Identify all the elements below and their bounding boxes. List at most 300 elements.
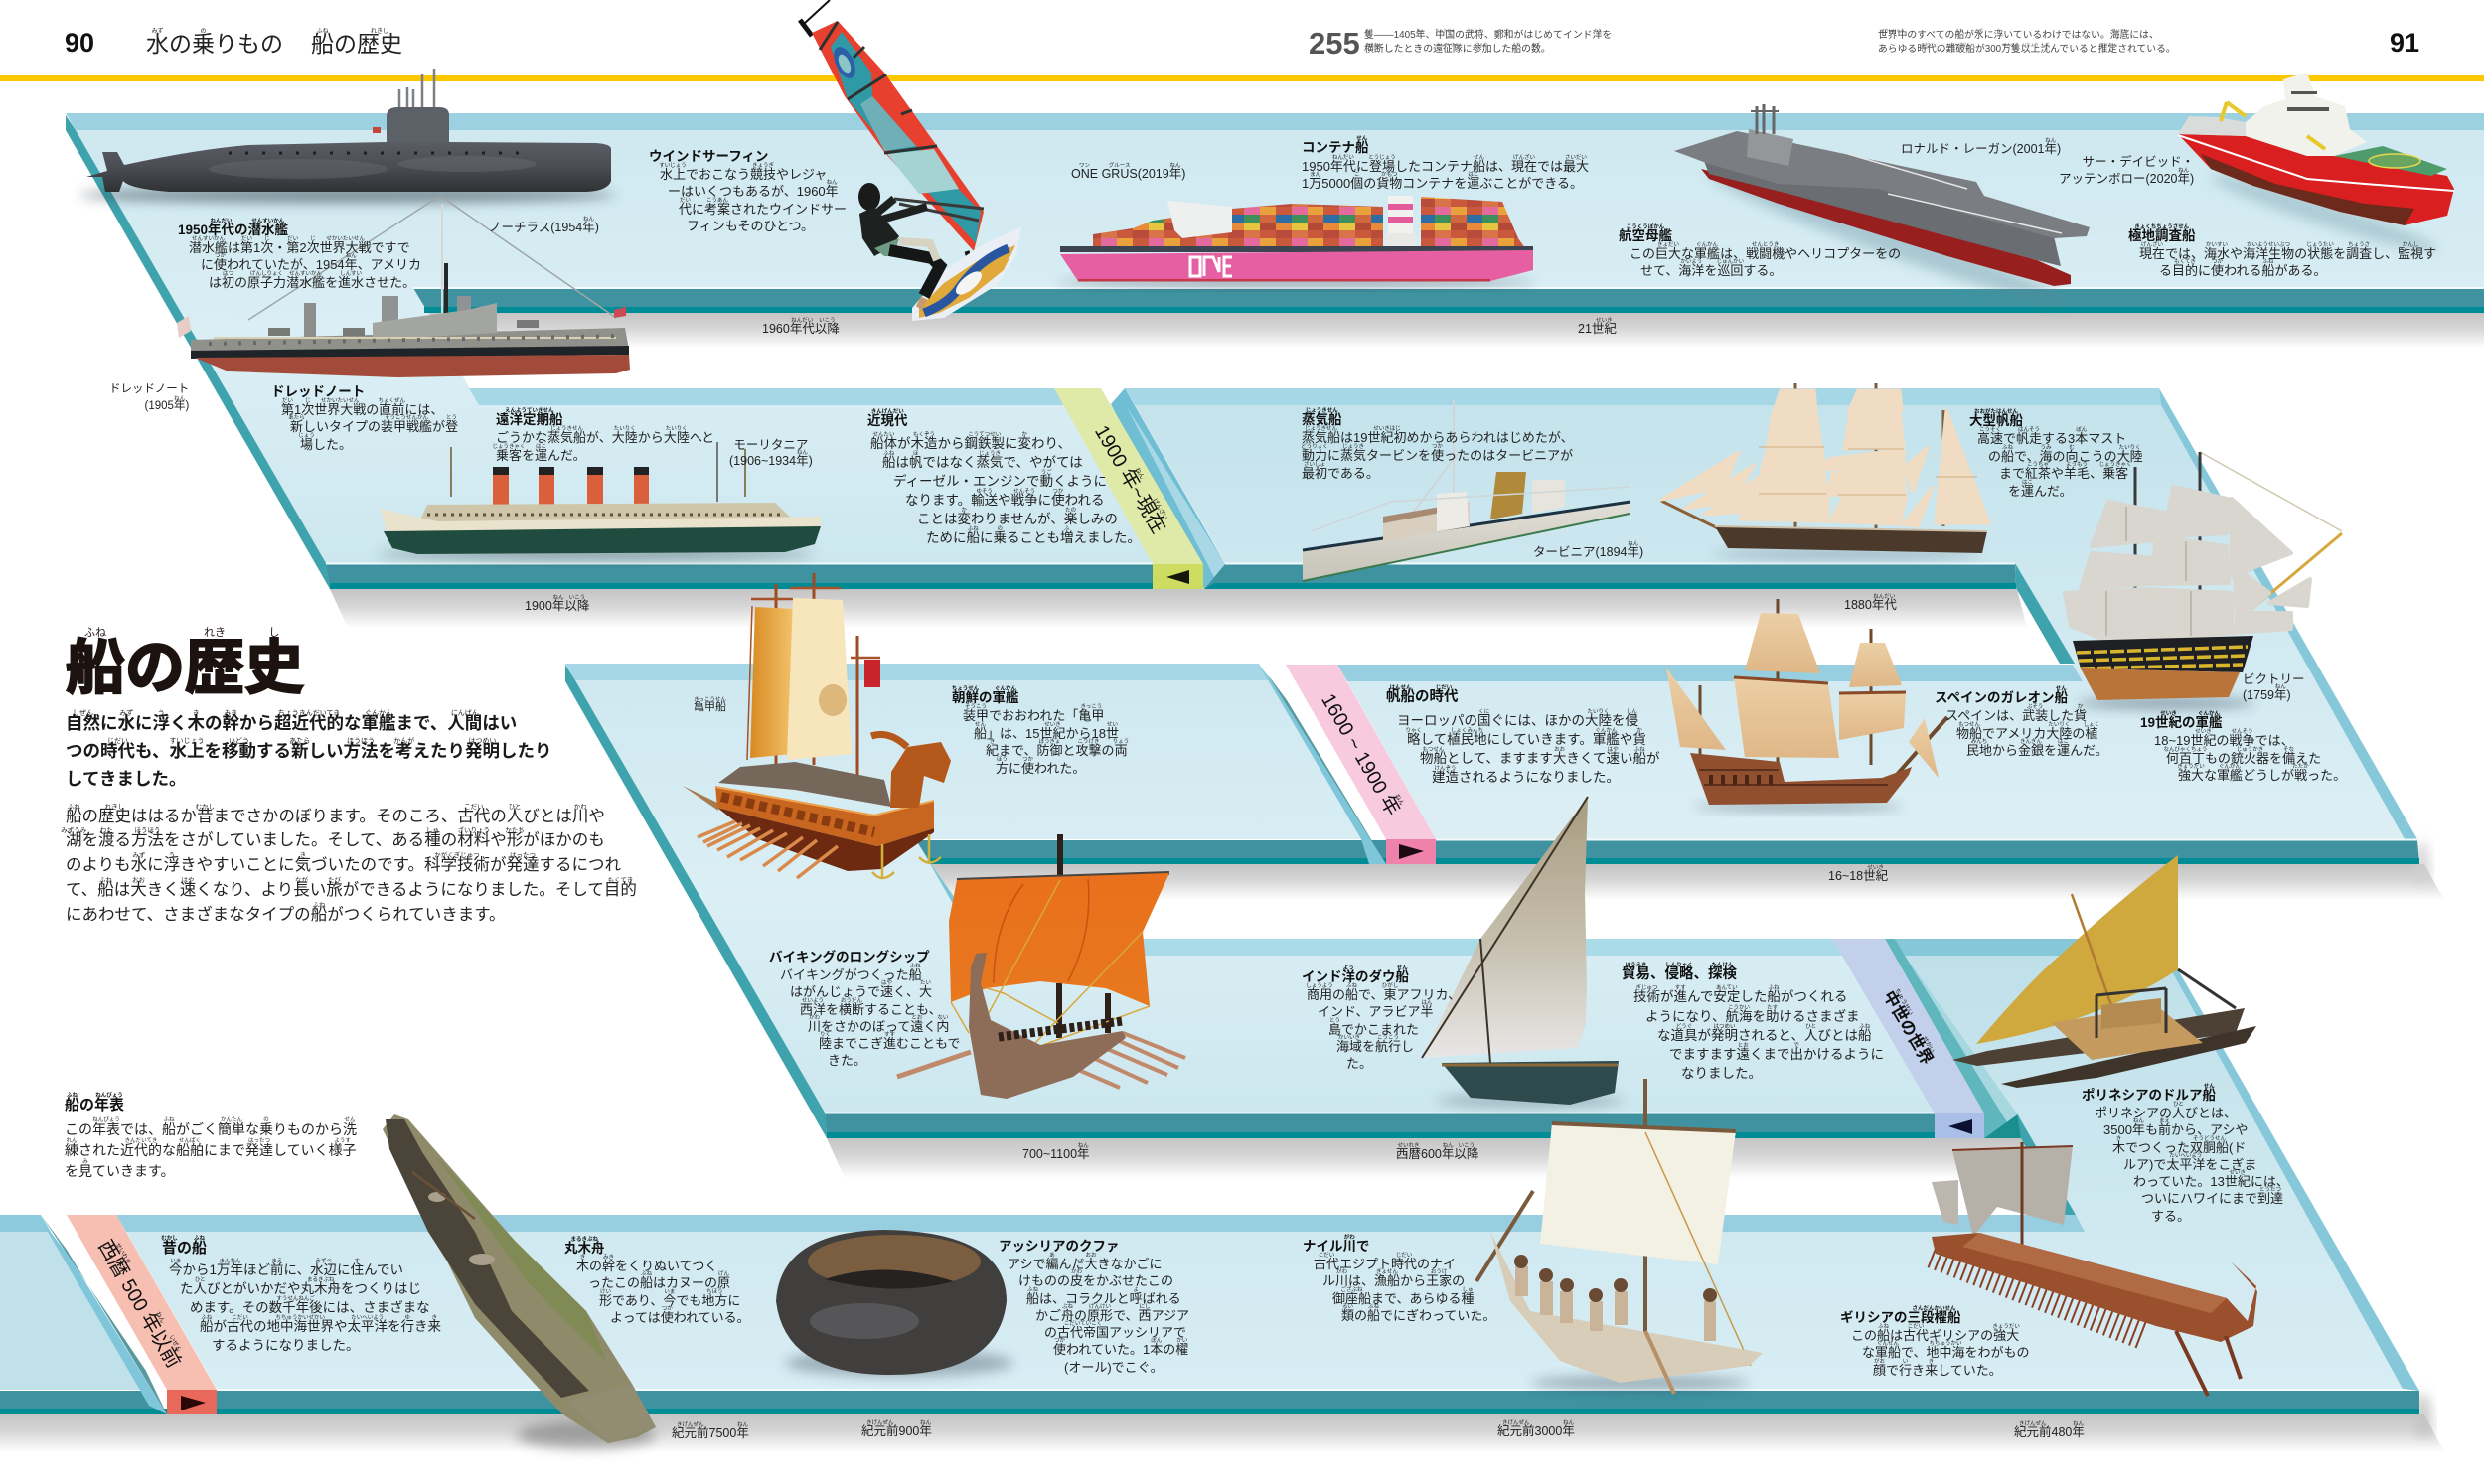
era tab label: before 500 CE: せいれき <box>114 1242 131 1265</box>
text: Greek trireme <box>1840 1309 2030 1379</box>
fact: 255 ships: ちゅうごく <box>1435 28 1455 33</box>
main heading: 船の歴史 <box>66 635 304 701</box>
text: Dreadnought: ちょくぜん <box>379 398 405 404</box>
text: Dreadnought: 場した。 <box>300 437 352 452</box>
text: container ship: さいだい <box>1565 155 1587 161</box>
ship: Egyptian Nile boat <box>1476 1079 1763 1394</box>
era tab: 1900 to present <box>1054 388 1225 589</box>
lead paragraph: ほうほう <box>347 738 375 745</box>
text: ancient boats: いま <box>170 1258 181 1263</box>
text: dugout canoe: げん <box>718 1271 729 1277</box>
label: Turbinia: タービニア(1894年) <box>1533 545 1643 559</box>
fact: shipwrecks <box>1878 28 2176 55</box>
body paragraph: むかし <box>195 803 215 811</box>
ship: submarine Nautilus <box>79 69 616 203</box>
text: windsurfing: 水上でおこなう競技やレジャ <box>660 167 827 182</box>
running title: れきし <box>371 29 388 35</box>
text: modern era: せんそう <box>1013 489 1035 495</box>
text: windsurfing: だい <box>680 198 691 204</box>
fact: shipwrecks: あらゆる時代の難破船が300万隻以上沈んでいると推定されている。 <box>1878 44 2176 55</box>
text: steamship: つか <box>1432 444 1443 450</box>
text: Viking longship: 川をさかのぼって遠く内 <box>808 1019 949 1034</box>
text: Korean warship: せい <box>1107 721 1118 727</box>
text: trade, invasion, exploration: あんてい <box>1716 985 1738 991</box>
text: age of sail: 帆船の時代 <box>1386 689 1459 705</box>
text: trade, invasion, exploration: 技術が進んで安定した船がつくれる <box>1633 989 1847 1004</box>
text: Nile boats: ナイル川で <box>1303 1239 1369 1254</box>
ship: container ship ONE Grus <box>1058 196 1535 286</box>
text: Assyrian coracle: の古代帝国アッシリアで <box>1044 1325 1186 1340</box>
text: 19th century warships: ぐんかん <box>2219 764 2241 770</box>
text: polar research ship: る目的に使われる船がある。 <box>2159 263 2326 278</box>
text: timeline intro: ねんぴょう <box>95 1093 123 1099</box>
text: age of sail <box>1386 684 1660 785</box>
text: container ship: とうじょう <box>1368 155 1396 161</box>
text: age of sail: じだい <box>1436 685 1452 691</box>
text: 1950s submarines: せんすいかん <box>251 219 284 224</box>
text: trade, invasion, exploration: はつめい <box>1713 1024 1736 1030</box>
text: polar research ship <box>2128 223 2436 278</box>
text: age of sail: はんせん <box>1389 685 1412 691</box>
text: Dreadnought: だい <box>282 398 293 404</box>
text: Viking longship: はがんじょうで速く、大 <box>790 984 932 999</box>
text: Indian Ocean dhow <box>1302 965 1461 1071</box>
text: ancient boats: みずべ <box>316 1258 332 1263</box>
text: container ship: 1万5000個の貨物コンテナを運ぶことができる。 <box>1302 176 1583 191</box>
text: 1950s submarines: しんすい <box>340 271 362 277</box>
text: steamship: じょうき <box>1342 444 1364 450</box>
text: ocean liner: はこ <box>536 444 546 450</box>
text: Indian Ocean dhow: ひがし <box>1382 983 1398 989</box>
label: Mauretania: (1906~1934年) <box>729 454 813 468</box>
main heading: ふね <box>84 627 106 639</box>
body paragraph: しゅ <box>426 827 439 834</box>
label: 700 to 1100: 700~1100年 <box>1022 1147 1090 1161</box>
text: 1950s submarines: ねんだい <box>211 219 233 224</box>
text: Viking longship <box>769 950 961 1068</box>
text: Korean warship: きっこう <box>1080 704 1102 710</box>
text: dugout canoe: よっては使われている。 <box>610 1310 750 1325</box>
text: Dreadnought: そうこうせんかん <box>385 415 428 421</box>
text: age of sail: たいりく <box>1587 709 1610 715</box>
text: modern era: 船は帆ではなく蒸気で、やがては <box>882 455 1083 470</box>
text: windsurfing <box>649 149 847 233</box>
text: timeline intro: きんだいてき <box>125 1138 157 1144</box>
text: timeline intro: せん <box>344 1116 356 1122</box>
text: 1950s submarines: 潜水艦は第1次・第2次世界大戦ですで <box>189 240 410 255</box>
label: 1900 onward: 1900年以降 <box>525 599 589 613</box>
ship: Greek trireme <box>1932 1142 2257 1396</box>
text: trade, invasion, exploration <box>1622 962 1884 1083</box>
text: ocean liner: 乗客を運んだ。 <box>496 448 586 463</box>
text: ocean liner: たいりく <box>614 426 636 432</box>
text: dugout canoe: まるきぶね <box>570 1237 598 1243</box>
label: Turbinia: ねん <box>1628 541 1638 547</box>
text: Polynesian canoe: ポリネシアの人びとは、 <box>2095 1106 2237 1120</box>
timeline band: 1960s to 21st century, joined to 1900s band <box>66 113 2484 589</box>
text: trade, invasion, exploration: ふね <box>1769 985 1780 991</box>
text: 1950s submarines: せかいたいせん <box>326 236 365 242</box>
text: modern era: ほ <box>913 451 919 457</box>
text: 19th century warships: せんそう <box>2232 729 2253 735</box>
label: Victory: (1759年) <box>2243 688 2291 702</box>
era tab label: before 500 CE: 西暦 500 年以前 <box>93 1237 185 1372</box>
body paragraph: はったつ <box>510 852 536 859</box>
text: modern era: ことは変わりませんが、楽しみの <box>917 512 1118 526</box>
text: steamship: 最初である。 <box>1302 466 1379 481</box>
text: aircraft carrier: せんとうき <box>1752 242 1779 248</box>
text: dugout canoe: けい <box>600 1289 611 1295</box>
text: modern era: か <box>1021 431 1027 437</box>
text: age of sail: 建造されるようになりました。 <box>1432 769 1620 785</box>
text: dugout canoe: ちほう <box>706 1289 723 1295</box>
text: trade, invasion, exploration: たんけん <box>1711 963 1734 968</box>
text: Viking longship: おうだん <box>841 998 862 1004</box>
body paragraph: かたち <box>505 827 525 834</box>
page number 91: 91 <box>2390 28 2419 58</box>
body paragraph: わた <box>100 827 113 834</box>
text: Greek trireme: がお <box>1874 1359 1885 1365</box>
text: timeline intro: かんたん <box>221 1116 242 1122</box>
text: aircraft carrier: 航空母艦 <box>1619 228 1672 243</box>
label: 900 BCE: 紀元前900年 <box>861 1424 932 1438</box>
text: Polynesian canoe: たいへいよう <box>2169 1153 2202 1159</box>
text: Indian Ocean dhow: かいいき <box>1338 1035 1360 1041</box>
label: Dreadnought left: ねん <box>174 396 185 402</box>
text: Polynesian canoe: わっていた。13世紀には、 <box>2133 1174 2289 1189</box>
text: Greek trireme: 顔で行き来していた。 <box>1873 1363 2002 1378</box>
body paragraph: ふね <box>312 902 325 909</box>
label: 700 to 1100: ねん <box>1078 1143 1089 1149</box>
text: ancient boats: た人びとがいかだや丸木舟をつくりはじ <box>180 1281 421 1295</box>
text: Indian Ocean dhow: とう <box>1329 1018 1340 1024</box>
era tab label: before 500 CE: いぜん <box>168 1334 182 1353</box>
fact: 255 ships: ふね <box>1512 42 1520 47</box>
ship: Korean turtle ship <box>683 573 951 878</box>
fact: shipwrecks: いじょう <box>2023 42 2039 47</box>
ship: Spanish galleon <box>1666 599 1947 811</box>
lead paragraph: いどう <box>229 738 249 745</box>
body paragraph: たび <box>328 877 341 884</box>
label: after 600 CE: いこう <box>1459 1143 1475 1149</box>
lead paragraph: ぐんかん <box>365 710 392 717</box>
text: Spanish galleon: きんぎん <box>2020 739 2042 745</box>
text: 1950s submarines <box>178 218 421 290</box>
label: 7500 BCE: ねん <box>737 1422 748 1428</box>
text: steamship: じょうきせん <box>1306 408 1338 414</box>
label: Victory: ビクトリー <box>2243 672 2305 686</box>
text: ancient boats: ちちゅうかいせかい <box>275 1315 325 1321</box>
text: steamship: 動力に蒸気タービンを使ったのはタービニアが <box>1302 448 1573 463</box>
text: ocean liner: えんようていきせん <box>505 408 554 414</box>
text: polar research ship: きょくちちょうさせん <box>2134 224 2189 230</box>
text: Assyrian coracle: ぽん <box>1151 1338 1162 1344</box>
label: 1880s: 1880年代 <box>1844 598 1897 612</box>
text: Assyrian coracle: よ <box>1133 1287 1139 1293</box>
text: Polynesian canoe: まえ <box>2159 1118 2170 1124</box>
text: Korean warship: りょう <box>1113 739 1129 745</box>
text: windsurfing: ーはいくつもあるが、1960年 <box>668 184 839 199</box>
text: aircraft carrier: じゅんかい <box>1717 259 1744 265</box>
text: Assyrian coracle: かい <box>1176 1338 1187 1344</box>
fact: 255 ships: ぶしょう <box>1467 28 1482 33</box>
text: modern era: ふ <box>1064 526 1070 532</box>
text: modern era: ふね <box>883 451 894 457</box>
text: aircraft carrier: かいよう <box>1680 259 1702 265</box>
label: 1960s onward: いこう <box>819 318 836 324</box>
lead paragraph: してきました。 <box>66 769 186 789</box>
fact: 255 ships: さんか <box>1476 42 1488 47</box>
text: Polynesian canoe: せん <box>2204 1084 2215 1090</box>
text: Nile boats: しゅ <box>1462 1287 1474 1293</box>
label: 1900 onward: ねん <box>553 595 564 601</box>
text: 19th century warships: 何百丁もの銃火器を備えた <box>2166 751 2321 765</box>
text: Greek trireme: い <box>1903 1359 1908 1365</box>
text: modern era: きんげんだい <box>871 409 904 415</box>
label: ONE GRUS: ONE GRUS(2019年) <box>1071 167 1185 181</box>
text: Nile boats: 類の船でにぎわっていた。 <box>1341 1308 1495 1323</box>
text: 19th century warships: 19世紀の軍艦 <box>2140 715 2223 730</box>
text: ocean liner: たいりく <box>666 426 688 432</box>
text: trade, invasion, exploration: なりました。 <box>1681 1066 1762 1081</box>
text: Greek trireme: ぐんせん <box>1877 1341 1899 1347</box>
body paragraph: なが <box>295 877 308 884</box>
label: after 600 CE: 西暦600年以降 <box>1396 1147 1478 1161</box>
text: Korean warship <box>952 685 1129 775</box>
text: modern era: ゆそう <box>976 489 993 495</box>
fact: shipwrecks: すいてい <box>2099 42 2115 47</box>
text: Greek trireme: こだい <box>1908 1324 1924 1330</box>
text: timeline intro: この年表では、船がごく簡単な乗りものから洗 <box>65 1120 357 1136</box>
text: age of sail: りゃく <box>1405 727 1422 733</box>
text: Greek trireme: さんだんかいせん <box>1912 1306 1956 1312</box>
text: ancient boats: するようになりました。 <box>212 1337 360 1353</box>
text: Polynesian canoe: ついにハワイにまで到達 <box>2141 1191 2283 1206</box>
text: Korean warship: ほう <box>997 757 1008 763</box>
text: large sailing ship: 高速で帆走する3本マスト <box>1977 431 2126 446</box>
timeline band: Polynesia to ancient section <box>116 939 2419 1414</box>
fact: 255 ships: おうだん <box>1366 42 1382 47</box>
text: steamship: じょうきせん <box>1305 426 1337 432</box>
label: Ronald Reagan: ロナルド・レーガン(2001年) <box>1901 142 2061 156</box>
label: 900 BCE: ねん <box>920 1420 931 1426</box>
text: age of sail: ふね <box>1634 747 1645 753</box>
text: age of sail: ヨーロッパの国ぐには、ほかの大陸を侵 <box>1397 713 1638 727</box>
text: ancient boats: ふね <box>194 1236 205 1242</box>
text: container ship: せん <box>1356 135 1367 141</box>
text: modern era: じょうき <box>979 451 1001 457</box>
text: trade, invasion, exploration: こうかい <box>1728 1005 1750 1011</box>
text: dugout canoe: 形であり、今でも地方に <box>599 1293 740 1308</box>
lead paragraph: みき <box>224 710 237 717</box>
text: trade, invasion, exploration: ぼうえき <box>1626 963 1646 968</box>
label: 3000 BCE: ねん <box>1563 1420 1574 1426</box>
text: container ship: 1950年代に登場したコンテナ船は、現在では最大 <box>1302 159 1589 173</box>
label: Victory <box>2243 672 2305 702</box>
text: windsurfing: きょうぎ <box>752 163 774 169</box>
label: 1900 onward: いこう <box>569 595 585 601</box>
era tab: medieval world <box>1832 939 2021 1138</box>
text: 1950s submarines: 1950年代の潜水艦 <box>178 223 288 237</box>
text: large sailing ship: 大型帆船 <box>1969 413 2023 428</box>
ship: Polynesian double canoe <box>1952 855 2256 1088</box>
text: Indian Ocean dhow: 商用の船で、東アフリカ、 <box>1307 987 1461 1002</box>
text: age of sail: はや <box>1608 747 1619 753</box>
text: dugout canoe: みき <box>603 1255 614 1261</box>
text: Korean warship: ぼうぎょ <box>1039 739 1060 745</box>
text: polar research ship: 極地調査船 <box>2128 228 2196 243</box>
text: age of sail: けんぞう <box>1434 765 1457 771</box>
text: Assyrian coracle: かご舟の原形で、西アジア <box>1035 1308 1189 1323</box>
text: Assyrian coracle: ふね <box>1027 1287 1038 1293</box>
text: container ship: げんざい <box>1513 155 1535 161</box>
body paragraph: ひと <box>509 803 522 811</box>
text: timeline intro: せんぱく <box>179 1138 201 1144</box>
label: 900 BCE: きげんぜん <box>866 1420 894 1426</box>
text: age of sail: 物船として、ますます大きくて速い船が <box>1420 751 1660 765</box>
text: Korean warship: せいき <box>1044 721 1061 727</box>
text: Spanish galleon: はこ <box>2058 739 2069 745</box>
text: polar research ship: もくてき <box>2174 259 2196 265</box>
text: 19th century warships: じゅうかき <box>2237 747 2263 753</box>
text: Korean warship: 方に使われた。 <box>996 761 1085 775</box>
text: age of sail: ぐんかん <box>1595 727 1617 733</box>
text: Korean warship: こうげき <box>1078 739 1100 745</box>
fact: shipwrecks: 世界中のすべての船が水に浮いているわけではない。海底には、 <box>1878 30 2159 41</box>
body paragraph: 船の歴史ははるか昔までさかのぼります。そのころ、古代の人びとは川や <box>66 807 605 824</box>
text: container ship: まん <box>1310 172 1320 178</box>
text: 1950s submarines: じ <box>310 236 316 242</box>
text: dugout canoe: 木の幹をくりぬいてつく <box>576 1259 717 1273</box>
text: large sailing ship: ようもう <box>2066 462 2088 468</box>
label: Sir David Attenborough: アッテンボロー(2020年) <box>2059 172 2194 186</box>
lead paragraph: すいじょう <box>169 738 204 745</box>
body paragraph: かわ <box>574 803 587 811</box>
fact: shipwrecks: まんせき <box>2003 42 2019 47</box>
ship: Assyrian coracle <box>776 1230 1013 1377</box>
text: Indian Ocean dhow: よう <box>1343 965 1354 971</box>
text: Nile boats: 御座船まで、あらゆる種 <box>1332 1291 1475 1306</box>
text: Viking longship: とお <box>911 1015 922 1021</box>
fact: shipwrecks: みず <box>1975 28 1983 33</box>
text: trade, invasion, exploration: 貿易、侵略、探検 <box>1622 966 1737 982</box>
body paragraph: れきし <box>105 803 124 811</box>
ship: Mauretania <box>378 442 821 559</box>
body paragraph: みず <box>132 852 145 859</box>
text: Polynesian canoe: 木でつくった双胴船(ド <box>2112 1140 2246 1155</box>
era tab label: medieval world: せかい <box>1921 1036 1935 1054</box>
text: age of sail: おお <box>1554 747 1565 753</box>
text: container ship: こ <box>1354 172 1359 178</box>
fact: 255 ships: よう <box>1593 28 1601 33</box>
label: ONE GRUS: ねん <box>1169 163 1180 169</box>
text: ocean liner: じょうきゃく <box>492 444 526 450</box>
label: 480 BCE: きげんぜん <box>2019 1421 2047 1427</box>
lead paragraph: う <box>158 710 165 717</box>
text: large sailing ship: ぼん <box>2076 427 2087 433</box>
text: Dreadnought: 第1次世界大戦の直前には、 <box>281 402 443 417</box>
yellow header rule <box>0 75 2484 81</box>
text: container ship <box>1302 135 1589 191</box>
text: modern era: つか <box>1052 489 1063 495</box>
text: Spanish galleon: たいりく <box>2048 721 2070 727</box>
text: dugout canoe: ふね <box>641 1271 652 1277</box>
text: Spanish galleon: スペインのガレオン船 <box>1935 690 2068 705</box>
text: Greek trireme: ふね <box>1878 1324 1889 1330</box>
text: Viking longship: バイキングのロングシップ <box>769 950 930 965</box>
text: Indian Ocean dhow: ふね <box>1346 983 1357 989</box>
label: Nautilus: ねん <box>583 217 594 223</box>
text: timeline intro: はったつ <box>248 1138 270 1144</box>
lead paragraph: にんげん <box>451 710 479 717</box>
text: Dreadnought: あたら <box>288 415 305 421</box>
text: Greek trireme: この船は古代ギリシアの強大 <box>1851 1328 2019 1343</box>
text: modern era: の <box>997 526 1003 532</box>
era tab label: 1600 to 1900: 1600 ~ 1900 年 <box>1317 690 1404 819</box>
text: Nile boats: ふね <box>1368 1304 1379 1310</box>
text: dugout canoe: つか <box>662 1306 673 1312</box>
text: Polynesian canoe <box>2082 1087 2289 1225</box>
text: modern era: ために船に乗ることも増えました。 <box>926 530 1141 545</box>
text: polar research ship: かんし <box>2403 242 2418 248</box>
ship: Turbinia <box>1303 400 1630 581</box>
text: Viking longship: はや <box>881 980 892 986</box>
text: steamship: どうりょく <box>1301 444 1328 450</box>
text: Polynesian canoe: せいき <box>2230 1170 2246 1176</box>
label: Sir David Attenborough: サー・デイビッド・ <box>2083 155 2194 169</box>
text: ancient boats: まえ <box>271 1258 282 1263</box>
body paragraph: かがくぎじゅつ <box>434 852 480 859</box>
ship: Indian Ocean dhow <box>1422 797 1625 1107</box>
label: after 600 CE: せいれき <box>1397 1143 1420 1149</box>
text: timeline intro: の <box>263 1116 269 1122</box>
text: Polynesian canoe: 3500年も前から、アシや <box>2103 1122 2248 1137</box>
text: Viking longship: ない <box>937 1015 948 1021</box>
text: Korean warship: ちょうせん <box>952 686 979 692</box>
text: modern era: 船体が木造から鋼鉄製に変わり、 <box>870 435 1071 451</box>
text: ancient boats <box>162 1236 441 1355</box>
text: trade, invasion, exploration: で <box>1793 1043 1799 1049</box>
text: 1950s submarines: せんすいかん <box>192 236 225 242</box>
ship: aircraft carrier Ronald Reagan <box>1674 104 2090 318</box>
text: polar research ship: ちょうさ <box>2348 242 2370 248</box>
text: Polynesian canoe: とうたつ <box>2259 1187 2281 1193</box>
label: ONE GRUS: グルース <box>1109 163 1131 169</box>
text: age of sail: 略して植民地にしていきます。軍艦や貨 <box>1407 731 1646 747</box>
text: steamship: さいしょ <box>1304 462 1325 468</box>
text: windsurfing: 代に考案されたウインドサー <box>679 202 847 217</box>
text: 1950s submarines: つか <box>215 253 226 259</box>
text: age of sail: もつせん <box>1423 747 1444 753</box>
text: age of sail: しん <box>1627 709 1637 715</box>
label: ONE GRUS: ワン <box>1079 163 1090 169</box>
text: ancient boats: こだい <box>232 1315 248 1321</box>
text: large sailing ship: たいりく <box>2119 445 2141 451</box>
text: windsurfing: ねん <box>827 180 838 186</box>
text: Korean warship: 装甲でおおわれた「亀甲 <box>963 708 1104 723</box>
text: trade, invasion, exploration: ぎじゅつ <box>1635 985 1658 991</box>
text: Assyrian coracle: かわ <box>1071 1269 1082 1275</box>
text: Nile boats: がわ <box>1336 1269 1347 1275</box>
body paragraph: ざいりょう <box>457 827 490 834</box>
text: 19th century warships: なんびゃくちょう <box>2163 747 2208 753</box>
text: 1950s submarines: げんしりょく <box>250 271 283 277</box>
text: Korean warship: 船」は、15世紀から18世 <box>974 725 1119 741</box>
text: age of sail: くに <box>1478 709 1489 715</box>
fact: 255 ships: ねん <box>1417 28 1425 33</box>
text: Spanish galleon: みんち <box>1971 739 1987 745</box>
text: large sailing ship: こうちゃ <box>2027 462 2049 468</box>
